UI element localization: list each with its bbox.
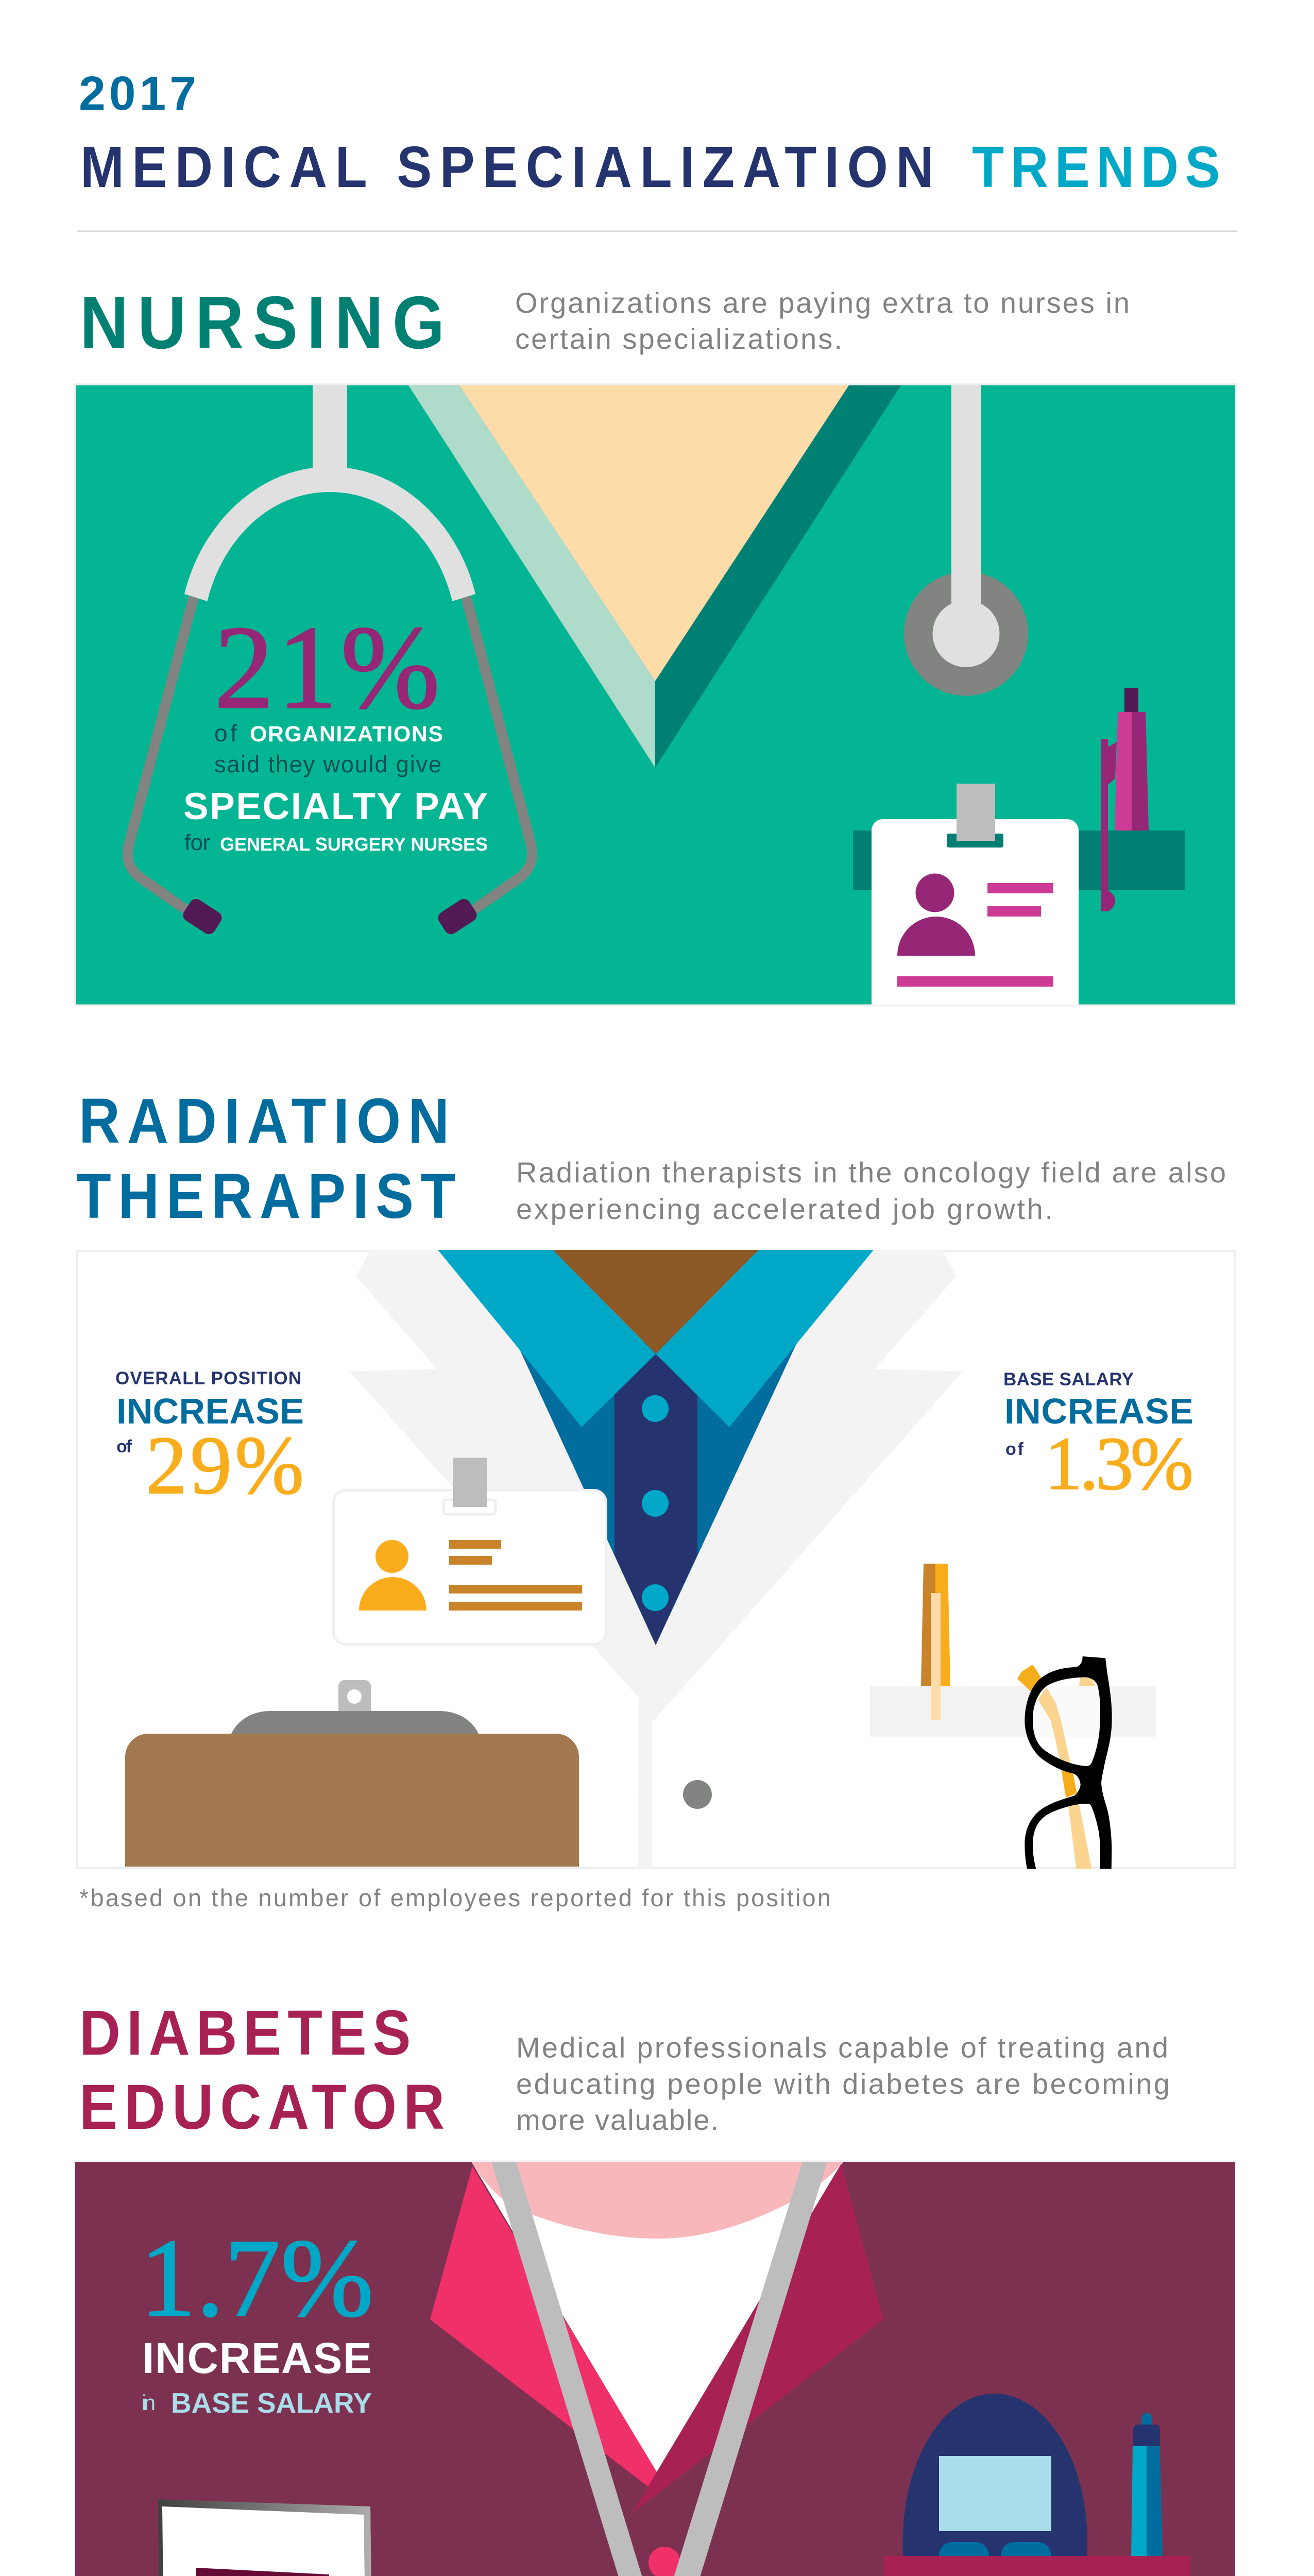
icon: glucose meter [902,2394,1087,2556]
section description: nursing: Organizations are paying extra to nurses in [515,286,1130,319]
section heading: diabetes educator [79,1997,445,2142]
pocket strip [853,831,1185,890]
section heading: diabetes educator: EDUCATOR [79,2072,445,2142]
title: MEDICAL SPECIALIZATION [80,134,934,199]
pocket strip [870,1686,1156,1737]
stat: overall position increase: INCREASE [116,1391,304,1431]
coat button [683,1780,712,1809]
icon: stethoscope [128,385,532,937]
stat: 21%: ORGANIZATIONS [250,722,443,747]
title: TRENDS [972,134,1220,199]
icon: person [359,1540,426,1611]
section description: radiation therapist: experiencing accelerated job growth. [516,1193,1053,1225]
icon: glasses [1017,1656,1112,1870]
header [77,66,1237,232]
icon: insulin pen [1131,2413,1163,2556]
shelf [883,2556,1190,2576]
stat: base salary increase: BASE SALARY [1003,1369,1134,1389]
shirt [515,1340,798,1645]
stat: base salary increase [1003,1369,1193,1505]
stat: base salary increase: INCREASE [1004,1391,1193,1431]
section description: nursing: certain specializations. [515,323,842,355]
collar [438,1250,874,1427]
stat: 21%: for [184,830,210,855]
section description: nursing [515,286,1130,355]
lanyard [491,2162,827,2576]
id badge [872,784,1079,1005]
stat: 1.7% increase: in [142,2391,156,2415]
section description: diabetes educator: educating people with diabetes are becoming [516,2067,1170,2100]
stat: 21%: SPECIALTY PAY [183,786,488,827]
id badge [334,1458,606,1645]
stat: 1.7% increase: INCREASE [142,2334,372,2382]
stat: base salary increase: of [1005,1439,1024,1459]
scrub top and neck [430,2162,883,2513]
brochure [158,2499,373,2576]
section description: diabetes educator [516,2031,1170,2136]
stat: 1.7% increase: BASE SALARY [171,2387,372,2419]
section description: diabetes educator: more valuable. [516,2104,719,2136]
stat: 21%: of [214,720,237,747]
icon: stethoscope chest piece [904,385,1028,696]
section description: diabetes educator: Medical professionals capable of treating and [516,2031,1168,2064]
stat: 21%: GENERAL SURGERY NURSES [220,834,488,855]
year: 2017 [79,66,196,120]
icon: person [897,874,975,956]
icon: pen [1101,688,1149,911]
stat: 21%: 21% [214,601,440,733]
section heading: radiation therapist [76,1086,455,1231]
stat: overall position increase: of [116,1437,132,1456]
icon: clipboard [125,1680,579,1867]
stat: overall position increase: OVERALL POSITION [115,1368,301,1388]
stat: base salary increase: 1.3% [1045,1421,1193,1505]
stat: 1.7% increase [140,2216,373,2419]
stat: 21% [183,601,488,855]
stat: 21%: said they would give [214,751,441,777]
section heading: nursing: NURSING [80,281,445,365]
lab coat [350,1250,963,1869]
section heading: diabetes educator: DIABETES [79,1997,411,2068]
section heading: radiation therapist: THERAPIST [76,1161,455,1231]
scrub collar [408,385,901,768]
footnote: *based on the number of employees reported for this position [79,1884,831,1911]
panel: diabetes educator [74,2160,1237,2576]
stat: overall position increase: 29% [146,1419,304,1511]
icon: pen [921,1564,950,1720]
panel: radiation therapist [77,1250,1235,1870]
section description: radiation therapist: Radiation therapists in the oncology field are also [516,1156,1226,1189]
stat: overall position increase [115,1368,304,1511]
stat: 1.7% increase: 1.7% [140,2216,373,2340]
section description: radiation therapist [516,1156,1226,1225]
section heading: radiation therapist: RADIATION [79,1086,449,1156]
panel: nursing [74,383,1237,1006]
